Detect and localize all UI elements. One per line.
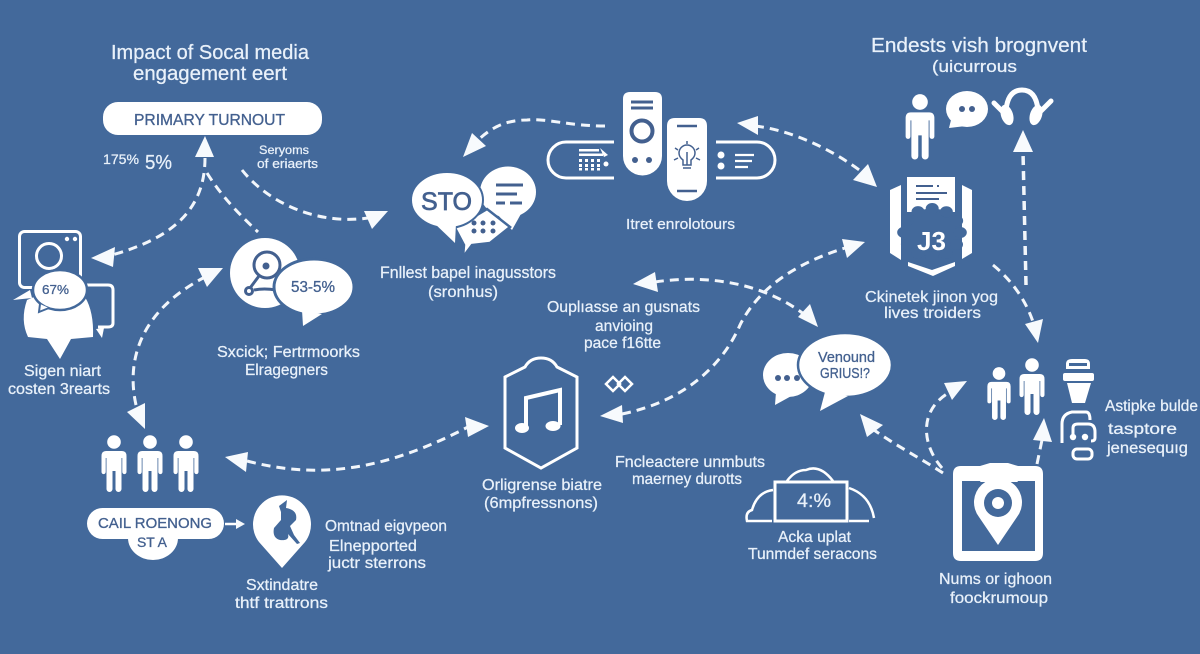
label: omtnad: juctr sterrons: [327, 555, 426, 572]
icon: location pin with figure: [253, 495, 311, 568]
percentage figures: 175%: [103, 152, 139, 167]
label: acka uplat: Acka uplat: [778, 529, 852, 546]
label: fncleactere: Fncleactere unmbuts: [615, 454, 765, 471]
icon: headphones: [994, 90, 1051, 127]
label: signal: Sigen niart: [24, 363, 102, 380]
label: orligrense: (6mpfressnons): [484, 495, 598, 512]
label: sxtindatre: [235, 577, 328, 612]
title: left heading: engagement eert: [133, 63, 287, 85]
small label: seryoms: of eriaerts: [257, 156, 319, 171]
icon: devices group: [548, 92, 775, 201]
arrow: magnifier to primary turnout: [207, 173, 258, 232]
label: fncleactere: maerney durotts: [632, 471, 742, 488]
label: acka uplat: [748, 529, 877, 563]
pill: call roenong: ST A: [137, 535, 167, 550]
arrow: camera up to person: [1033, 418, 1052, 464]
label: fnllest: (sronhus): [428, 284, 498, 301]
icon: two people: [987, 358, 1044, 420]
label: orligrense: Orligrense biatre: [482, 477, 602, 494]
label: ouplıasse: pace f16tte: [584, 335, 661, 352]
label: astipke: [1105, 398, 1198, 457]
arrow: pill to pin: [225, 519, 245, 529]
label: orligrense: [482, 477, 602, 512]
label: ouplıasse: Ouplıasse an gusnats: [547, 299, 700, 316]
label: omtnad: [325, 518, 447, 572]
arrow: long dashed music to badge: [600, 239, 865, 423]
icon: conversation bubbles: [763, 333, 892, 411]
arrow: music badge to people: [225, 417, 489, 472]
label: signal: [8, 363, 110, 398]
label: ckinetek: lives troiders: [884, 305, 981, 322]
small label: seryoms: Seryoms: [259, 143, 309, 157]
pill: call roenong: [87, 508, 224, 560]
label: nums or ighoon: foockrumoup: [950, 590, 1048, 607]
icon: J3 document badge: J3: [917, 226, 946, 256]
icon: conversation bubbles: GRIUS!?: [820, 366, 870, 382]
label: sxtindatre: thtf trattrons: [235, 595, 328, 612]
icon: speech bubble cluster: STO: [421, 188, 472, 216]
label: omtnad: Elnepported: [329, 538, 417, 555]
icon: person top right: [906, 94, 934, 160]
label: fncleactere: [615, 454, 765, 488]
icon: speech bubble cluster: [411, 166, 536, 257]
icon: camera with pin: [953, 463, 1043, 561]
icon: cloud with percentage: [747, 468, 874, 521]
label: ckinetek: [865, 289, 998, 322]
icon: music badge: [505, 358, 577, 468]
icon: J3 document badge: [890, 177, 972, 276]
primary turnout pill: [103, 102, 322, 135]
arrow: camera to people: [926, 381, 967, 468]
icon: conversation bubbles: Venound: [818, 350, 875, 366]
label: ouplıasse: anvioing: [595, 318, 653, 335]
label: fnllest: Fnllest bapel inagusstors: [380, 264, 556, 282]
arrow: devices to speech cluster: [463, 120, 605, 157]
arrow: badge down to people: [993, 265, 1043, 343]
arrow: to speech cluster: [242, 170, 388, 229]
label: fnllest: [380, 264, 556, 301]
arrow: devices to badge two-way: [737, 116, 877, 187]
small label: seryoms: [257, 143, 319, 171]
icon: profile with speech bubble: 67%: [42, 282, 69, 297]
label: sxtindatre: Sxtindatre: [246, 577, 318, 594]
pill: call roenong: CAIL ROENONG: [98, 515, 212, 532]
arrow: two-way people to magnifier: [127, 268, 223, 429]
label: astipke: Astipke bulde: [1105, 398, 1198, 415]
icon: linked diamonds: [606, 377, 632, 391]
label: astipke: tasptore: [1108, 421, 1177, 438]
icon: cloud with percentage: 4:%: [797, 491, 831, 512]
arrow: camera to bubbles: [860, 414, 943, 473]
title: left heading: [111, 42, 310, 85]
icon: magnifier with percentage bubble: [230, 238, 354, 326]
arrow: up to headphones: [1013, 130, 1033, 285]
heading: top right: [871, 34, 1087, 76]
label: ckinetek: Ckinetek jinon yog: [865, 289, 998, 306]
arrow: two-way label to bubbles: [633, 272, 818, 327]
arrow: up to primary turnout from left icon: [91, 136, 214, 267]
icon: cup and cable: [1062, 359, 1095, 459]
percentage figures: 5%: [145, 152, 172, 174]
heading: top right: Endests vish brognvent: [871, 34, 1087, 57]
label: itret enrolotours: Itret enrolotours: [626, 216, 735, 233]
label: ouplıasse: [547, 299, 700, 352]
label: feature works: [217, 344, 360, 379]
heading: top right: (uicurrous: [932, 58, 1017, 76]
label: nums or ighoon: Nums or ighoon: [939, 571, 1052, 588]
percentage figures: [103, 152, 172, 174]
label: astipke: jenesequıg: [1106, 440, 1188, 457]
label: acka uplat: Tunmdef seracons: [748, 546, 877, 563]
label: omtnad: Omtnad eigvpeon: [325, 518, 447, 535]
icon: magnifier with percentage bubble: 53-5%: [291, 279, 335, 296]
title: left heading: Impact of Socal media: [111, 42, 310, 64]
label: feature works: Elragegners: [245, 362, 328, 379]
icon: chat bubble top right: [946, 91, 988, 128]
label: nums or ighoon: [939, 571, 1052, 607]
icon: three people: [102, 435, 198, 492]
label: feature works: Sxcick; Fertrmoorks: [217, 344, 360, 361]
primary turnout pill: PRIMARY TURNOUT: [134, 112, 285, 129]
label: signal: costen 3rearts: [8, 381, 110, 398]
icon: profile with speech bubble: [13, 232, 113, 359]
